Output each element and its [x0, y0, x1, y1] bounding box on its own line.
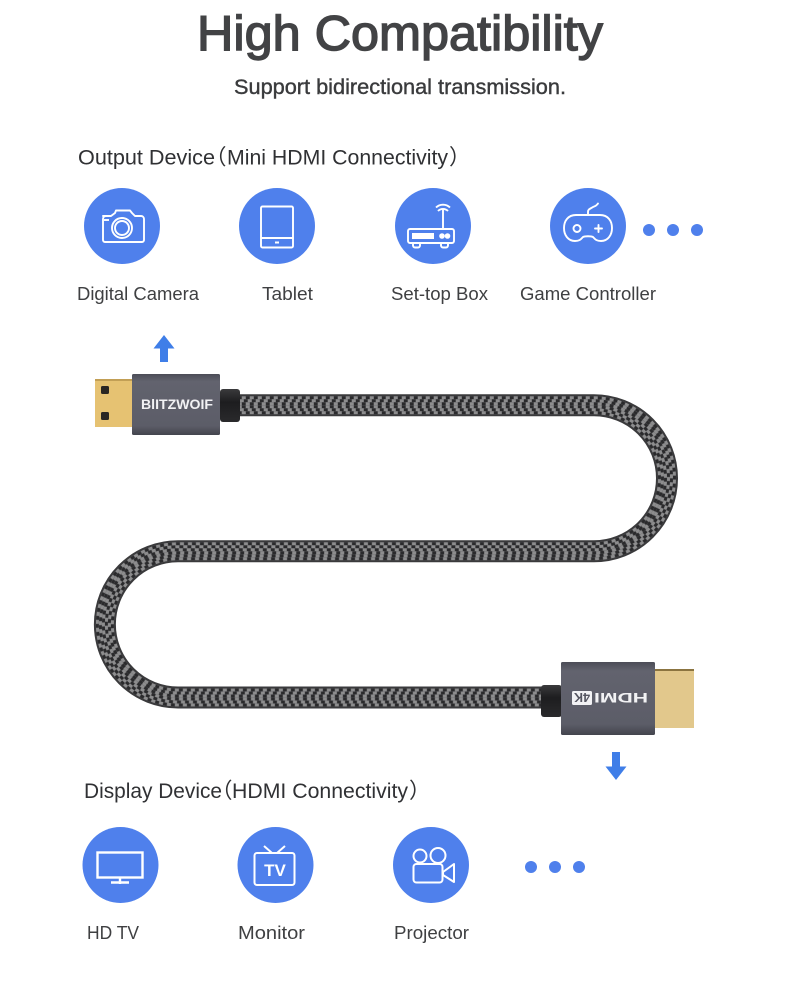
icon: set-top box — [395, 188, 471, 264]
icon: tablet — [239, 188, 315, 264]
heading: output device: ） — [449, 146, 471, 170]
icon: more dots — [643, 224, 703, 236]
heading: output device: （ — [205, 146, 227, 170]
title: High Compatibility — [197, 7, 604, 61]
heading: output device: Mini HDMI Connectivity — [227, 146, 448, 170]
icon: HD TV — [82, 827, 158, 903]
metal shell — [561, 662, 655, 735]
connector: mini HDMI — [95, 374, 240, 435]
icon: more dots — [525, 861, 585, 873]
icon: game controller — [550, 188, 626, 264]
label: projector: Projector — [394, 922, 469, 943]
label: HD TV: HD TV — [87, 922, 140, 943]
icon: monitor TV: TV — [264, 861, 287, 880]
heading: output device: Output Device — [78, 146, 215, 170]
heading: display device: ） — [409, 779, 431, 803]
brand text: BlITZWOIF — [141, 397, 213, 412]
label: game controller: Game Controller — [520, 283, 656, 304]
cable — [97, 398, 674, 705]
heading: output device — [78, 146, 471, 170]
gold plug — [654, 669, 694, 728]
arrow: down — [606, 752, 626, 780]
label: monitor: Monitor — [238, 922, 305, 943]
HDMI 4K logo, rotated — [572, 690, 648, 706]
HDMI 4K logo, rotated: HDMI — [594, 690, 648, 706]
gold plug — [95, 379, 133, 427]
HDMI 4K logo, rotated: 4K — [574, 690, 590, 704]
icon: projector camera — [393, 827, 469, 903]
heading: display device: （ — [211, 779, 233, 803]
panel: output devices — [77, 188, 703, 304]
icon: monitor TV — [238, 827, 314, 903]
metal shell — [132, 374, 220, 435]
panel: display devices — [82, 827, 585, 943]
black sleeve — [541, 685, 562, 717]
heading: display device: Display Device — [84, 779, 222, 803]
black sleeve — [220, 389, 240, 422]
label: tablet: Tablet — [262, 283, 313, 304]
label: set-top box: Set-top Box — [391, 283, 489, 304]
heading: display device: HDMI Connectivity — [232, 779, 408, 803]
icon: digital camera — [84, 188, 160, 264]
connector: HDMI — [541, 662, 694, 735]
subtitle: Support bidirectional transmission. — [234, 75, 566, 99]
heading: display device — [84, 779, 431, 803]
arrow: up — [154, 335, 174, 362]
label: digital camera: Digital Camera — [77, 283, 200, 304]
